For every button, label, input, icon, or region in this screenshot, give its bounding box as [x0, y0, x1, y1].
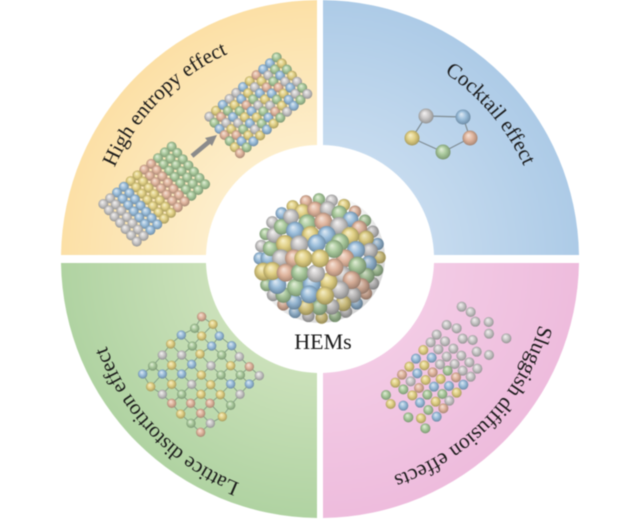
heading: Lattice distortion effect: Lattice distortion effect — [96, 346, 240, 496]
nanoparticle shading — [255, 193, 385, 323]
arrow — [192, 135, 217, 156]
heading: Sluggish diffusion effects: Sluggish diffusion effects — [394, 326, 552, 486]
centre: HEM nanoparticle — [253, 193, 386, 324]
distorted lattice — [138, 312, 264, 437]
striped atom lattice — [98, 142, 210, 247]
label: HEMs: HEMs — [294, 329, 352, 354]
heading: Cocktail effect: Cocktail effect — [446, 64, 534, 166]
panel: high entropy effect — [60, 0, 318, 256]
panel: sluggish diffusion effects — [322, 262, 580, 518]
quadrant background: pink — [323, 263, 579, 518]
quadrant background: green — [61, 263, 317, 518]
heading: High entropy effect: High entropy effect — [102, 44, 228, 168]
quadrant background: blue — [323, 0, 579, 255]
panel: cocktail effect — [322, 0, 580, 256]
ring of five atoms — [404, 108, 478, 160]
diffusing atom block — [381, 302, 511, 433]
quadrant background: yellow — [61, 0, 317, 255]
panel: lattice distortion effect — [60, 262, 318, 518]
mixed atom lattice — [204, 52, 312, 158]
